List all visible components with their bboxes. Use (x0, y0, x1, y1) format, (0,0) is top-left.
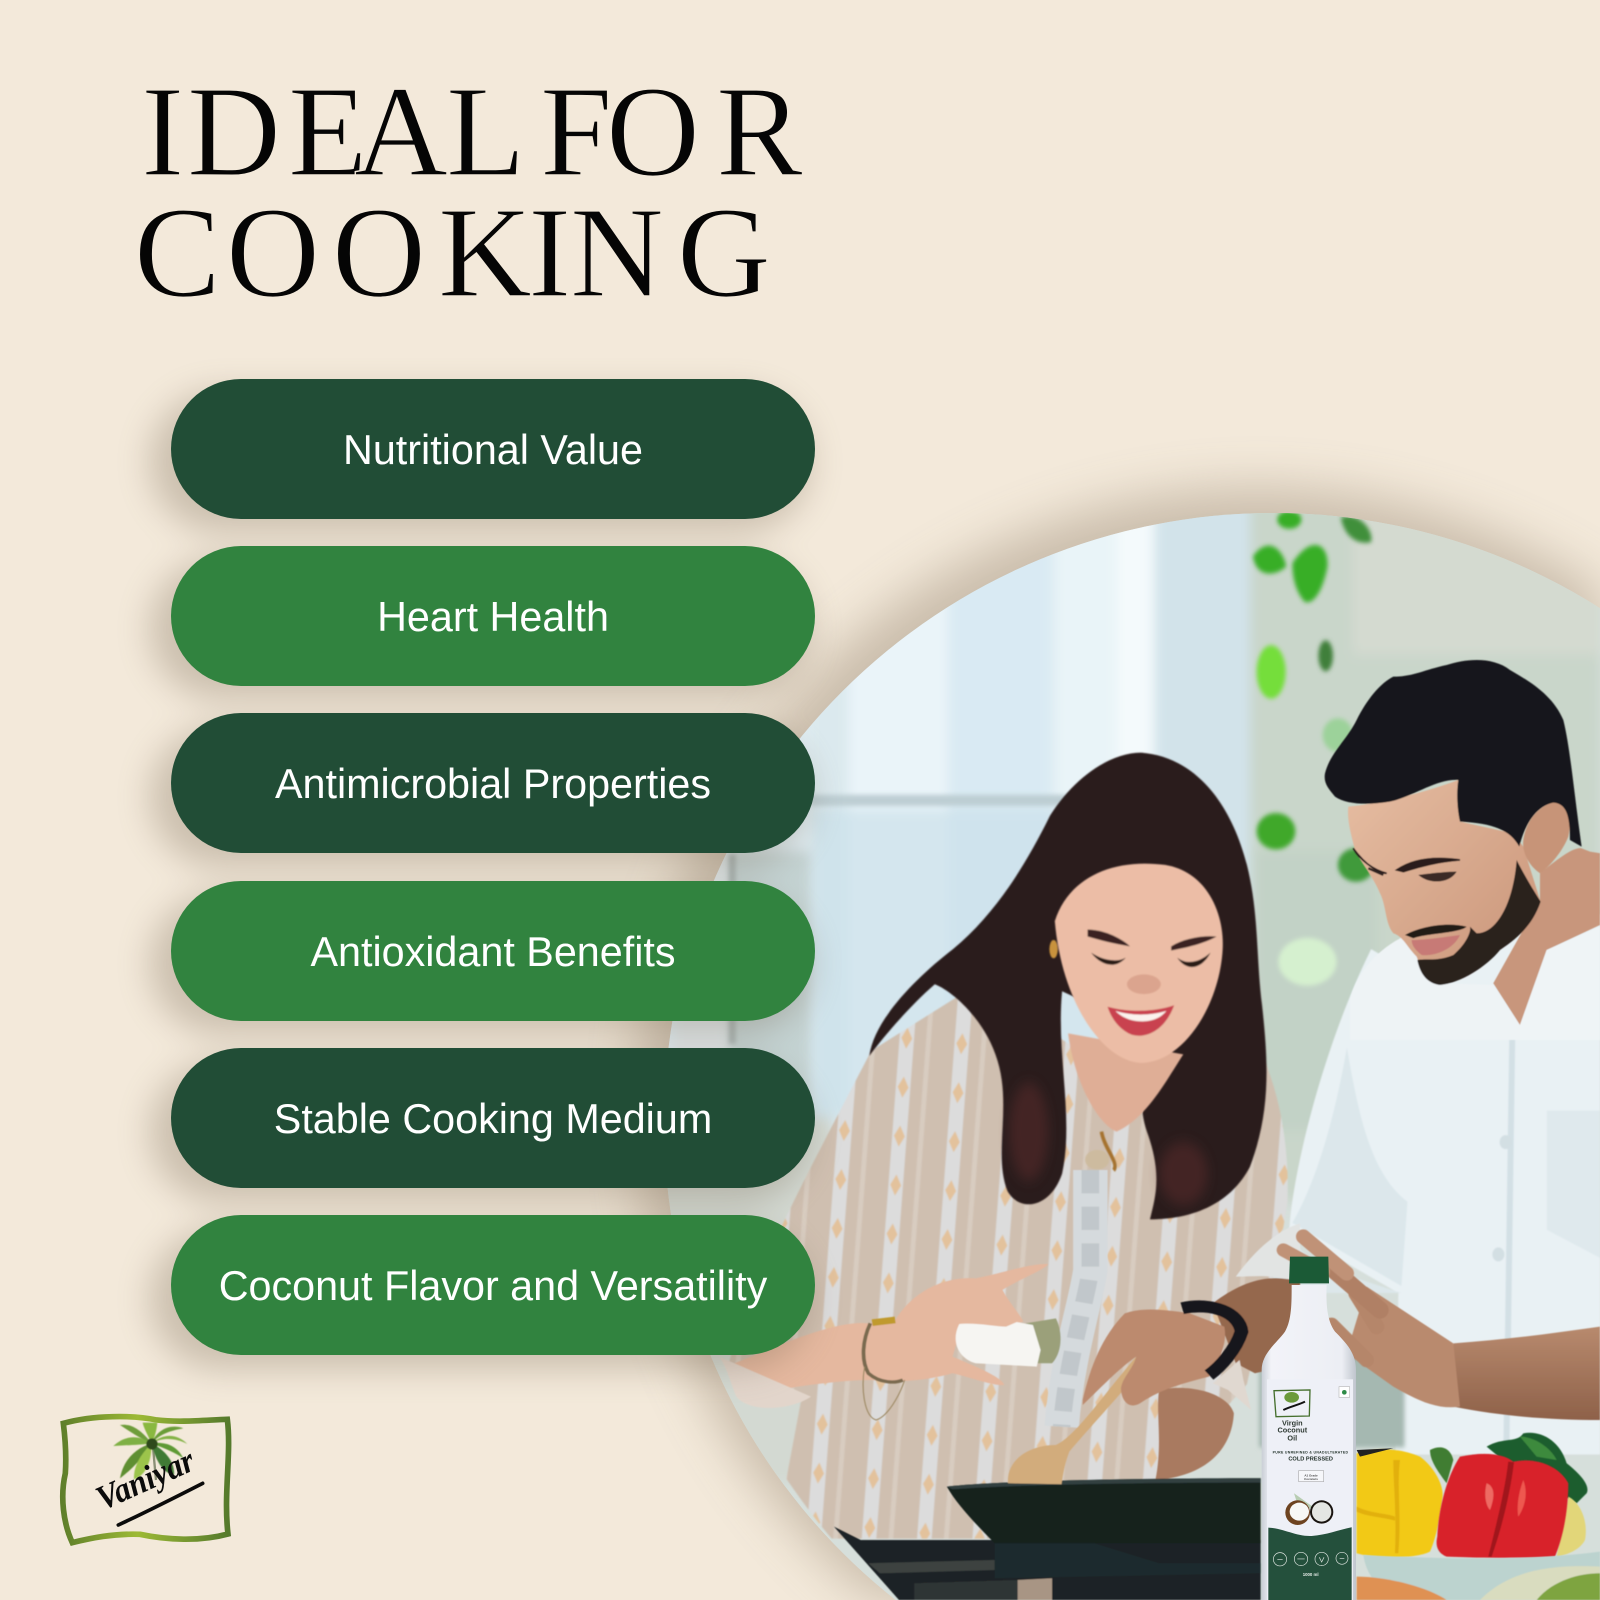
hair highlights (1009, 1082, 1208, 1205)
pill: stable cooking medium (171, 1048, 815, 1188)
label dark band (1268, 1527, 1352, 1600)
title (134, 60, 803, 325)
plant leaves (1253, 511, 1374, 986)
pill: nutritional value (171, 379, 815, 519)
cauliflower (1557, 1497, 1586, 1557)
photo circle shadow (636, 488, 1600, 1600)
ear (1523, 802, 1570, 873)
vegetables, hand and plate (1283, 1237, 1600, 1600)
logo wordmark: Vaniyar (90, 1441, 201, 1518)
forearm of woman (1213, 1278, 1300, 1373)
window mullions (727, 792, 1066, 1045)
pill: nutritional value: Nutritional Value (343, 427, 643, 473)
a1 grade badge: Coconuts (1304, 1477, 1318, 1481)
product name: Oil (1287, 1433, 1297, 1442)
tagline: PURE UNREFINED & UNADULTERATED (1273, 1450, 1348, 1454)
man shirt (1256, 914, 1600, 1454)
face (1348, 779, 1540, 961)
pill: coconut flavor and versatility (171, 1215, 815, 1355)
hair (1325, 660, 1582, 847)
label veg mark (1339, 1387, 1350, 1397)
panel: cooking photo (650, 500, 1600, 1600)
cold pressed label: COLD PRESSED (1288, 1457, 1333, 1463)
photo scene (650, 500, 1600, 1539)
a1 grade badge: A1 Grade (1304, 1473, 1318, 1477)
greens (1430, 1433, 1587, 1503)
pill: coconut flavor and versatility: Coconut Flavor and Versatility (219, 1263, 768, 1309)
bottle label (1267, 1379, 1353, 1600)
salt shaker (956, 1313, 1061, 1367)
collar and upper shirt (1350, 937, 1520, 1040)
window background (650, 500, 1600, 1483)
beard (1417, 860, 1541, 985)
other arm (1155, 1388, 1234, 1480)
pill: heart health: Heart Health (377, 594, 609, 640)
pill: antimicrobial properties: Antimicrobial Properties (275, 761, 711, 807)
woman body (729, 984, 1288, 1539)
lips (1412, 935, 1460, 955)
red bell pepper (1437, 1454, 1568, 1558)
title: COOKING (134, 181, 771, 325)
collar right (1520, 940, 1600, 1039)
pill: antioxidant benefits: Antioxidant Benefits (310, 929, 676, 975)
pan (947, 1478, 1261, 1543)
label icons (1273, 1552, 1348, 1566)
wooden spoon (1008, 1357, 1146, 1484)
product name: Coconut (1277, 1426, 1308, 1435)
pill: antioxidant benefits (171, 881, 815, 1021)
embroidered placket (1062, 1170, 1090, 1427)
man forearm and hand (1283, 1237, 1600, 1420)
bottle cap (1289, 1257, 1329, 1283)
stove (834, 1527, 1261, 1600)
hand on spoon (1083, 1309, 1225, 1405)
sleeve cuff (1213, 1360, 1251, 1410)
bottle of virgin coconut oil (1262, 1257, 1356, 1600)
background behind counter (1257, 1358, 1407, 1450)
logo palm tree (113, 1423, 187, 1480)
logo frame (63, 1417, 229, 1543)
bracelet (863, 1320, 905, 1420)
beaded bracelet (1182, 1306, 1242, 1375)
white sleeve (1236, 1223, 1300, 1283)
label logo (1274, 1390, 1310, 1417)
coconut illustration (1285, 1493, 1333, 1525)
arm holding shaker (734, 1264, 1048, 1397)
volume: 1000 ml (1303, 1572, 1319, 1577)
fingers over shaker (959, 1313, 1016, 1328)
brows and eyes (1353, 848, 1460, 873)
logo: vaniyar (63, 1417, 229, 1543)
title: IDEAL FOR (141, 60, 803, 204)
pill: heart health (171, 546, 815, 686)
pill: stable cooking medium: Stable Cooking Medium (274, 1096, 712, 1142)
pill shadows (150, 392, 810, 1369)
pill: antimicrobial properties (171, 713, 815, 853)
woman hair (869, 753, 1267, 1219)
neck (1493, 848, 1600, 1025)
a1 grade badge (1299, 1471, 1324, 1482)
dark edge by pepper (1357, 1448, 1393, 1457)
hands, shaker, spoon, pan and stove (719, 1170, 1300, 1600)
product name (1277, 1418, 1308, 1442)
woman face (1049, 864, 1223, 1170)
lace cuff (719, 1357, 811, 1408)
man head (1325, 660, 1600, 1040)
mustache (1405, 925, 1467, 938)
plate (1357, 1552, 1600, 1600)
product name: Virgin (1282, 1418, 1303, 1427)
yellow bell pepper (1357, 1449, 1443, 1557)
